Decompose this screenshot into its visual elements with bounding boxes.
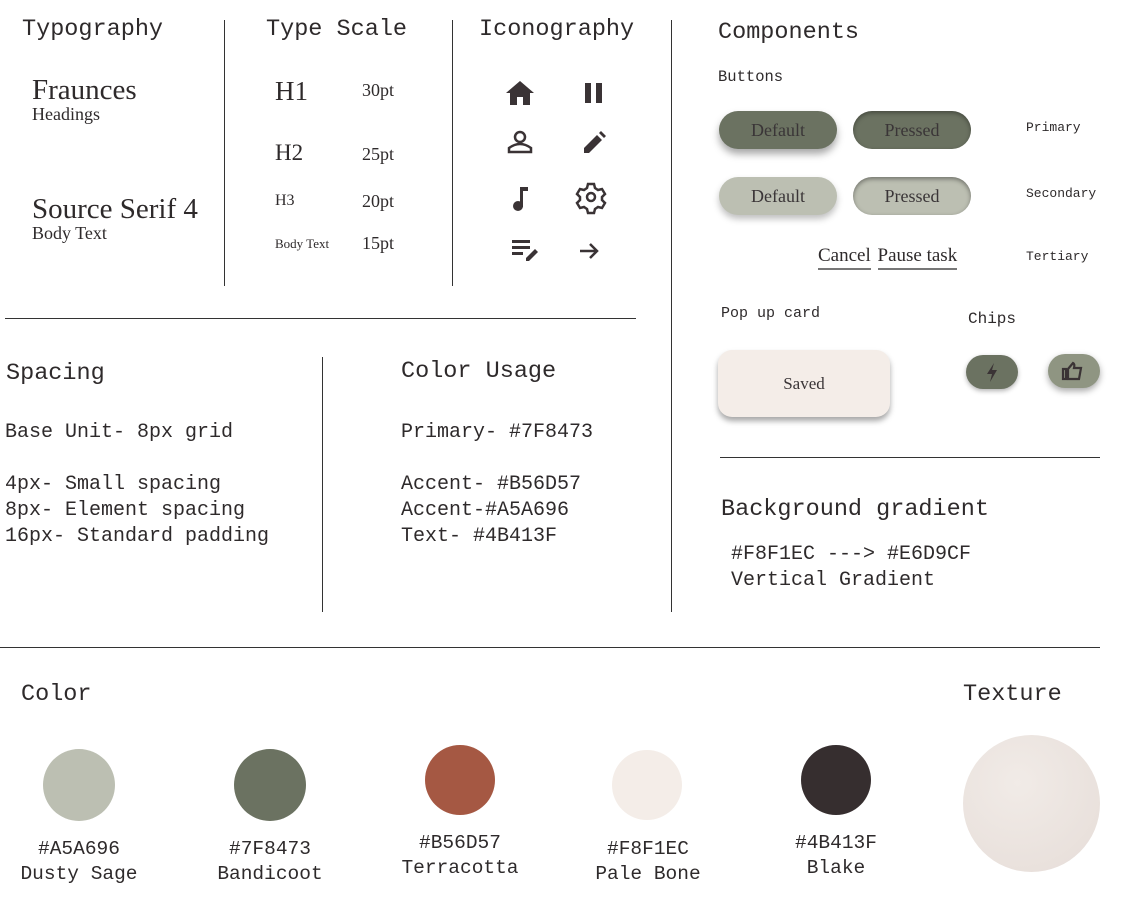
primary pressed button: Pressed <box>884 120 940 140</box>
type scale list: 20pt <box>362 191 394 211</box>
type scale list: H3 <box>275 192 295 209</box>
gradient text <box>731 543 971 592</box>
spacing text: Base Unit- 8px grid <box>5 421 233 444</box>
swatch: pale bone <box>595 750 701 885</box>
title: spacing: Spacing <box>6 360 105 387</box>
label: buttons: Buttons <box>718 68 783 86</box>
title: background gradient: Background gradient <box>721 496 989 523</box>
icon: home <box>506 81 534 105</box>
type scale list: H1 <box>275 76 308 106</box>
color usage text: Text- #4B413F <box>401 525 557 548</box>
swatch: terracotta <box>401 745 519 879</box>
swatch: blake <box>795 745 877 879</box>
pop up card <box>718 350 890 417</box>
swatch: terracotta: Terracotta <box>401 857 519 879</box>
label: primary: Primary <box>1026 120 1081 135</box>
primary default button <box>719 111 837 149</box>
label: pop up card: Pop up card <box>721 305 820 322</box>
title: color usage: Color Usage <box>401 358 556 385</box>
font sample: Fraunces <box>32 74 137 124</box>
font sample: Fraunces: Fraunces <box>32 74 137 106</box>
swatch: bandicoot: #7F8473 <box>229 838 311 860</box>
swatch: dusty sage <box>20 749 138 885</box>
swatch: blake: Blake <box>807 857 865 879</box>
spacing text <box>5 421 269 548</box>
swatch: blake: #4B413F <box>795 832 877 854</box>
title: iconography: Iconography <box>479 16 634 43</box>
spacing text: 8px- Element spacing <box>5 499 245 522</box>
gradient text: Vertical Gradient <box>731 569 935 592</box>
type scale list: 25pt <box>362 144 394 164</box>
type scale list: Body Text <box>275 236 329 251</box>
spacing text: 4px- Small spacing <box>5 473 221 496</box>
label: tertiary: Tertiary <box>1026 249 1088 264</box>
title: components: Components <box>718 19 859 46</box>
secondary pressed button: Pressed <box>884 186 940 206</box>
color usage text: Accent- #B56D57 <box>401 473 581 496</box>
title: typography: Typography <box>22 16 163 43</box>
swatch: dusty sage: Dusty Sage <box>20 863 138 885</box>
swatch: bandicoot <box>217 749 323 885</box>
color usage text <box>401 421 593 548</box>
secondary default button <box>719 177 837 215</box>
secondary default button: Default <box>751 186 805 206</box>
chip: thumbs up <box>1048 354 1100 388</box>
type scale list: 15pt <box>362 233 394 253</box>
chip: lightning <box>966 355 1018 389</box>
icon: arrow <box>580 244 597 258</box>
swatch: pale bone: #F8F1EC <box>607 838 689 860</box>
label: chips: Chips <box>968 310 1016 328</box>
color usage text: Primary- #7F8473 <box>401 421 593 444</box>
font sample: Source Serif: Body Text <box>32 223 107 243</box>
tertiary buttons: Cancel Pause task <box>818 245 957 266</box>
title: color: Color <box>21 681 92 708</box>
label: secondary: Secondary <box>1026 186 1096 201</box>
pop up card: Saved <box>783 374 825 392</box>
type scale list: H2 <box>275 140 303 165</box>
icon: pencil <box>584 131 606 153</box>
texture swatch <box>963 735 1100 872</box>
font sample: Source Serif <box>32 193 198 243</box>
swatch: dusty sage: #A5A696 <box>38 838 120 860</box>
primary pressed button <box>853 111 971 149</box>
swatch: pale bone: Pale Bone <box>595 863 701 885</box>
color usage text: Accent-#A5A696 <box>401 499 569 522</box>
icon: pause <box>585 83 602 103</box>
secondary pressed button <box>853 177 971 215</box>
font sample: Fraunces: Headings <box>32 104 100 124</box>
title: type scale: Type Scale <box>266 16 407 43</box>
icon: edit list <box>512 240 538 261</box>
icon: gear <box>577 184 605 213</box>
icon: music note <box>513 187 528 211</box>
type scale list: 30pt <box>362 80 394 100</box>
swatch: terracotta: #B56D57 <box>419 832 501 854</box>
gradient text: #F8F1EC ---> #E6D9CF <box>731 543 971 566</box>
font sample: Source Serif: Source Serif 4 <box>32 193 198 225</box>
icon grid <box>506 81 606 261</box>
type scale list <box>275 76 394 253</box>
title: texture: Texture <box>963 681 1062 708</box>
primary default button: Default <box>751 120 805 140</box>
swatch: bandicoot: Bandicoot <box>217 863 323 885</box>
spacing text: 16px- Standard padding <box>5 525 269 548</box>
icon: person <box>509 132 531 152</box>
